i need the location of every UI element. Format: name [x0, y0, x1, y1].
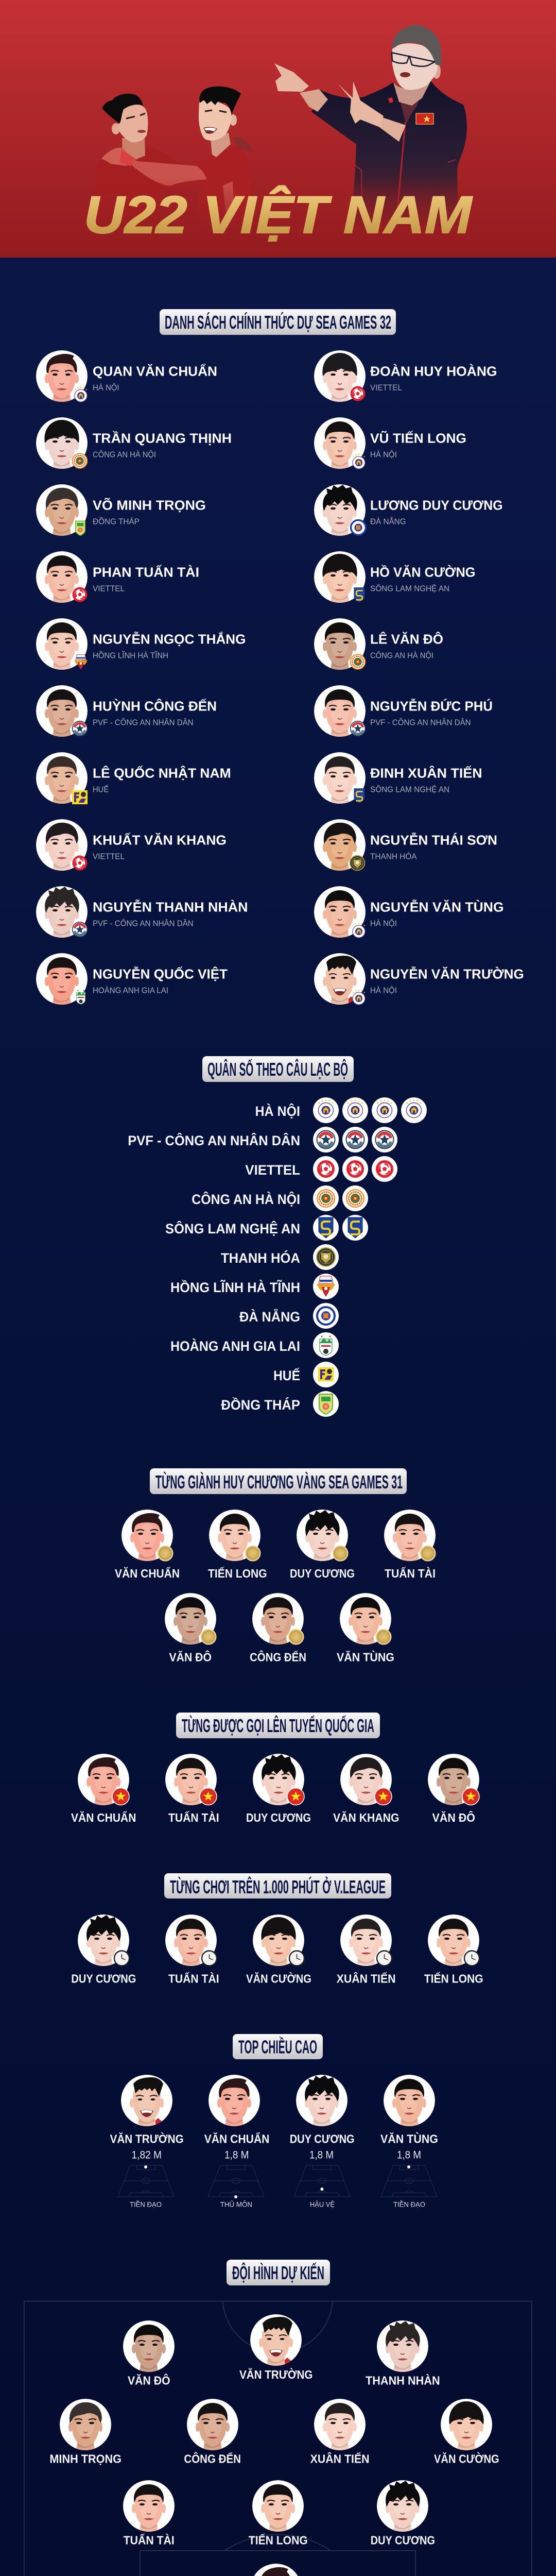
club row: Hà Nội: HÀ NỘI [255, 1103, 300, 1119]
minutes: Tiến Long: TIẾN LONG [424, 1971, 483, 1986]
lineup: Duy Cương: DUY CƯƠNG [371, 2534, 435, 2547]
tall player: Duy Cương: HẬU VỆ [310, 2200, 335, 2209]
tall player: Văn Tùng: 1,8 M [397, 2149, 421, 2161]
minutes: Văn Cường [246, 1914, 311, 1986]
club row: Thanh Hóa: THANH HÓA [221, 1250, 300, 1266]
player card: Khuất Văn Khang [36, 819, 227, 871]
heading: TỪNG CHƠI TRÊN 1.000 PHÚT Ở V.LEAGUE [170, 1876, 386, 1897]
call-up: Tuấn Tài [165, 1754, 219, 1824]
player card: Võ Minh Trọng [36, 484, 206, 536]
player card: Hồ Văn Cường [314, 551, 476, 603]
lineup: Công Đến [184, 2399, 241, 2466]
lineup: Tiến Long: TIẾN LONG [249, 2533, 308, 2547]
player card: Nguyễn Văn Tùng [314, 886, 504, 938]
minutes: Xuân Tiến: XUÂN TIẾN [337, 1971, 396, 1986]
club row: PVF - Công An Nhân Dân: PVF - CÔNG AN NHÂN DÂN [128, 1132, 300, 1148]
heading [160, 309, 396, 335]
tall player: Văn Tùng: VĂN TÙNG [380, 2132, 438, 2146]
club row: Huế: HUẾ [273, 1367, 300, 1383]
tall player: Văn Chuẩn: VĂN CHUẨN [204, 2132, 269, 2146]
medalist: Tiến Long: TIẾN LONG [208, 1566, 267, 1580]
player card: Quan Văn Chuẩn [36, 350, 217, 402]
call-up: Duy Cương [246, 1754, 311, 1824]
player card: Đoàn Huy Hoàng: ĐOÀN HUY HOÀNG [370, 364, 497, 379]
minutes: Tiến Long [424, 1914, 483, 1986]
section: official roster [36, 309, 524, 1005]
medalist: Duy Cương: DUY CƯƠNG [290, 1567, 355, 1580]
lineup: Duy Cương [371, 2480, 435, 2547]
player card: Nguyễn Quốc Việt: NGUYỄN QUỐC VIỆT [93, 967, 228, 982]
tall player: Duy Cương [290, 2075, 355, 2209]
player card: Khuất Văn Khang: VIETTEL [93, 852, 125, 861]
call-up: Văn Chuẩn [71, 1754, 136, 1824]
minutes: Duy Cương: DUY CƯƠNG [71, 1972, 136, 1986]
title: U22 VIỆT NAM [84, 185, 473, 244]
lineup: Văn Trường [239, 2314, 312, 2381]
club row: Đồng Tháp: ĐỒNG THÁP [221, 1397, 300, 1413]
lineup: Tiến Long [249, 2480, 308, 2547]
tall player: Văn Chuẩn [204, 2075, 269, 2209]
call-up: Văn Khang [333, 1754, 399, 1824]
player card: Đinh Xuân Tiến [314, 752, 482, 804]
club row: Viettel [245, 1156, 397, 1182]
heading [227, 2260, 330, 2285]
header banner [0, 0, 556, 258]
player card: Nguyễn Văn Trường [314, 953, 524, 1005]
lineup: Tuấn Tài: TUẤN TÀI [124, 2533, 175, 2547]
player card: Trần Quang Thịnh [36, 417, 232, 469]
player card: Nguyễn Thái Sơn [314, 819, 497, 871]
heading: TOP CHIỀU CAO [238, 2036, 317, 2058]
club row: Đà Nẵng: ĐÀ NẴNG [239, 1308, 300, 1325]
lineup: Thanh Nhàn: THANH NHÀN [366, 2373, 440, 2387]
heading [176, 1713, 380, 1738]
player card: Lê Quốc Nhật Nam: LÊ QUỐC NHẬT NAM [93, 766, 231, 781]
player card: Nguyễn Ngọc Thắng: HỒNG LĨNH HÀ TĨNH [93, 650, 168, 660]
lineup: Văn Cường: VĂN CƯỜNG [434, 2451, 499, 2466]
section: squad by club [128, 1056, 427, 1417]
player card: Nguyễn Văn Trường: NGUYỄN VĂN TRƯỜNG [370, 967, 524, 982]
lineup: Minh Trọng: MINH TRỌNG [49, 2452, 121, 2466]
section: called up to national team [71, 1713, 479, 1824]
medalist: Tuấn Tài: TUẤN TÀI [385, 1566, 436, 1580]
lineup: Văn Đô [123, 2320, 175, 2387]
illustration: coach pointing [274, 25, 467, 227]
player card: Vũ Tiến Long [314, 417, 466, 469]
player card: Nguyễn Đức Phú: PVF - CÔNG AN NHÂN DÂN [370, 717, 471, 727]
call-up: Văn Chuẩn: VĂN CHUẨN [71, 1810, 136, 1824]
medalist: Văn Đô: VĂN ĐÔ [169, 1650, 212, 1664]
medalist: Công Đến [250, 1593, 306, 1664]
player card: Khuất Văn Khang: KHUẤT VĂN KHANG [93, 833, 227, 848]
club row: Sông Lam Nghệ An [165, 1215, 368, 1241]
call-up: Duy Cương: DUY CƯƠNG [246, 1811, 311, 1824]
heading [150, 1468, 407, 1494]
call-up: Tuấn Tài: TUẤN TÀI [168, 1810, 219, 1824]
player card: Hồ Văn Cường: HỒ VĂN CƯỜNG [370, 565, 476, 580]
tall player: Văn Chuẩn: THỦ MÔN [220, 2200, 252, 2209]
player card: Nguyễn Văn Trường: HÀ NỘI [370, 985, 397, 995]
player card: Lương Duy Cương: LƯƠNG DUY CƯƠNG [370, 499, 503, 513]
medalist: Văn Tùng [337, 1593, 394, 1664]
tall player: Văn Tùng [380, 2075, 438, 2209]
tall player: Văn Trường: 1,82 M [132, 2149, 162, 2161]
player card: Đinh Xuân Tiến: ĐINH XUÂN TIẾN [370, 766, 482, 781]
club row: PVF - Công An Nhân Dân [128, 1127, 397, 1153]
player card: Trần Quang Thịnh: TRẦN QUANG THỊNH [93, 431, 232, 446]
medalist: Công Đến: CÔNG ĐẾN [250, 1650, 306, 1664]
player card: Nguyễn Văn Tùng: NGUYỄN VĂN TÙNG [370, 900, 504, 915]
club row: Hồng Lĩnh Hà Tĩnh: HỒNG LĨNH HÀ TĨNH [170, 1279, 300, 1295]
club row: Thanh Hóa [221, 1244, 339, 1270]
player card: Vũ Tiến Long: HÀ NỘI [370, 449, 397, 460]
player card: Huỳnh Công Đến: PVF - CÔNG AN NHÂN DÂN [93, 717, 194, 727]
club row: Viettel: VIETTEL [245, 1162, 300, 1178]
player card: Quan Văn Chuẩn: QUAN VĂN CHUẨN [93, 364, 217, 379]
player card: Phan Tuấn Tài: PHAN TUẤN TÀI [93, 565, 199, 580]
player card: Nguyễn Thanh Nhàn [36, 886, 248, 938]
club row: Hoàng Anh Gia Lai [170, 1332, 339, 1358]
section: SEA Games 31 gold medalists [115, 1468, 436, 1664]
tall player: Duy Cương: DUY CƯƠNG [290, 2132, 355, 2146]
player card: Nguyễn Thanh Nhàn: NGUYỄN THANH NHÀN [93, 900, 248, 915]
section: projected lineup [24, 2260, 532, 2576]
section: tallest players [110, 2034, 438, 2209]
player card: Huỳnh Công Đến [36, 685, 217, 737]
medalist: Văn Tùng: VĂN TÙNG [337, 1650, 394, 1664]
player card: Lê Văn Đô [314, 618, 443, 670]
heading: TỪNG ĐƯỢC GỌI LÊN TUYỂN QUỐC GIA [182, 1715, 374, 1736]
player card: Võ Minh Trọng: ĐỒNG THÁP [93, 516, 140, 527]
player card: Quan Văn Chuẩn: HÀ NỘI [93, 382, 119, 393]
tall player: Văn Chuẩn: 1,8 M [224, 2149, 249, 2161]
player card: Nguyễn Thái Sơn: NGUYỄN THÁI SƠN [370, 833, 497, 848]
lineup: Xuân Tiến: XUÂN TIẾN [310, 2451, 370, 2466]
club row: Hồng Lĩnh Hà Tĩnh [170, 1274, 339, 1299]
club row: Đà Nẵng [239, 1303, 339, 1329]
pitch lines [24, 2301, 532, 2576]
club row: Huế [273, 1362, 339, 1387]
lineup: Minh Trọng [49, 2399, 121, 2466]
tall player: Duy Cương: 1,8 M [309, 2149, 334, 2161]
medalist: Duy Cương [290, 1510, 355, 1580]
lineup: Văn Chuẩn [246, 2564, 311, 2576]
heading [164, 1873, 391, 1899]
player card: Nguyễn Quốc Việt: HOÀNG ANH GIA LAI [93, 985, 168, 995]
player card: Lê Quốc Nhật Nam: HUẾ [93, 784, 109, 794]
player card: Nguyễn Đức Phú [314, 685, 493, 737]
player card: Lương Duy Cương [314, 484, 503, 536]
player card: Nguyễn Quốc Việt [36, 953, 228, 1005]
tall player: Văn Tùng: TIỀN ĐẠO [393, 2200, 425, 2209]
illustration: two players embracing [101, 87, 253, 216]
lineup: Thanh Nhàn [366, 2320, 440, 2387]
player card: Nguyễn Ngọc Thắng: NGUYỄN NGỌC THẮNG [93, 632, 246, 647]
tall player: Văn Trường: TIỀN ĐẠO [130, 2200, 162, 2209]
player card: Phan Tuấn Tài: VIETTEL [93, 584, 125, 594]
lineup: Văn Trường: VĂN TRƯỜNG [239, 2367, 312, 2381]
medalist: Văn Chuẩn: VĂN CHUẨN [115, 1566, 180, 1580]
lineup: Tuấn Tài [123, 2480, 175, 2547]
club row: Đồng Tháp [221, 1391, 339, 1417]
player card: Võ Minh Trọng: VÕ MINH TRỌNG [93, 498, 206, 513]
player card: Nguyễn Văn Tùng: HÀ NỘI [370, 918, 397, 928]
player card: Phan Tuấn Tài [36, 551, 199, 603]
player card: Nguyễn Thanh Nhàn: PVF - CÔNG AN NHÂN DÂN [93, 918, 194, 928]
lineup: Văn Cường [434, 2399, 499, 2466]
heading: ĐỘI HÌNH DỰ KIẾN [232, 2262, 324, 2283]
player card: Lê Văn Đô: LÊ VĂN ĐÔ [370, 632, 443, 647]
heading [233, 2034, 323, 2059]
minutes: Văn Cường: VĂN CƯỜNG [246, 1971, 311, 1986]
call-up: Văn Đô [428, 1754, 479, 1824]
player card: Trần Quang Thịnh: CÔNG AN HÀ NỘI [93, 449, 156, 460]
section: over 1,000 minutes in V.League [71, 1873, 483, 1986]
club row: Hà Nội [255, 1097, 427, 1123]
minutes: Duy Cương [71, 1914, 136, 1986]
player card: Đoàn Huy Hoàng: VIETTEL [370, 383, 402, 393]
player card: Nguyễn Ngọc Thắng [36, 618, 246, 670]
lineup: Công Đến: CÔNG ĐẾN [184, 2451, 241, 2466]
medalist: Tiến Long [208, 1510, 267, 1580]
medalist: Tuấn Tài [384, 1510, 436, 1580]
club row: Công An Hà Nội [192, 1185, 368, 1211]
call-up: Văn Khang: VĂN KHANG [333, 1810, 399, 1824]
player card: Lê Quốc Nhật Nam [36, 752, 231, 804]
club row: Sông Lam Nghệ An: SÔNG LAM NGHỆ AN [165, 1221, 300, 1236]
minutes: Tuấn Tài: TUẤN TÀI [168, 1971, 219, 1986]
medalist: Văn Chuẩn [115, 1510, 180, 1580]
heading [202, 1056, 354, 1082]
player card: Đoàn Huy Hoàng [314, 350, 497, 402]
club row: Hoàng Anh Gia Lai: HOÀNG ANH GIA LAI [170, 1338, 300, 1354]
player card: Nguyễn Đức Phú: NGUYỄN ĐỨC PHÚ [370, 699, 493, 714]
club row: Công An Hà Nội: CÔNG AN HÀ NỘI [192, 1191, 300, 1207]
tall player: Văn Trường [110, 2075, 184, 2209]
player card: Huỳnh Công Đến: HUỲNH CÔNG ĐẾN [93, 699, 217, 714]
lineup: Xuân Tiến [310, 2399, 370, 2466]
tall player: Văn Trường: VĂN TRƯỜNG [110, 2132, 184, 2146]
player card: Hồ Văn Cường: SÔNG LAM NGHỆ AN [370, 583, 449, 594]
medalist: Văn Đô [165, 1593, 216, 1664]
lineup: Văn Đô: VĂN ĐÔ [128, 2373, 170, 2387]
player card: Lương Duy Cương: ĐÀ NẴNG [370, 516, 406, 527]
minutes: Tuấn Tài [165, 1914, 219, 1986]
player card: Vũ Tiến Long: VŨ TIẾN LONG [370, 431, 466, 446]
minutes: Xuân Tiến [337, 1914, 396, 1986]
player card: Lê Văn Đô: CÔNG AN HÀ NỘI [370, 650, 433, 660]
player card: Đinh Xuân Tiến: SÔNG LAM NGHỆ AN [370, 784, 449, 794]
heading: QUÂN SỐ THEO CÂU LẠC BỘ [207, 1058, 348, 1080]
player card: Nguyễn Thái Sơn: THANH HÓA [370, 851, 417, 861]
call-up: Văn Đô: VĂN ĐÔ [432, 1810, 475, 1824]
